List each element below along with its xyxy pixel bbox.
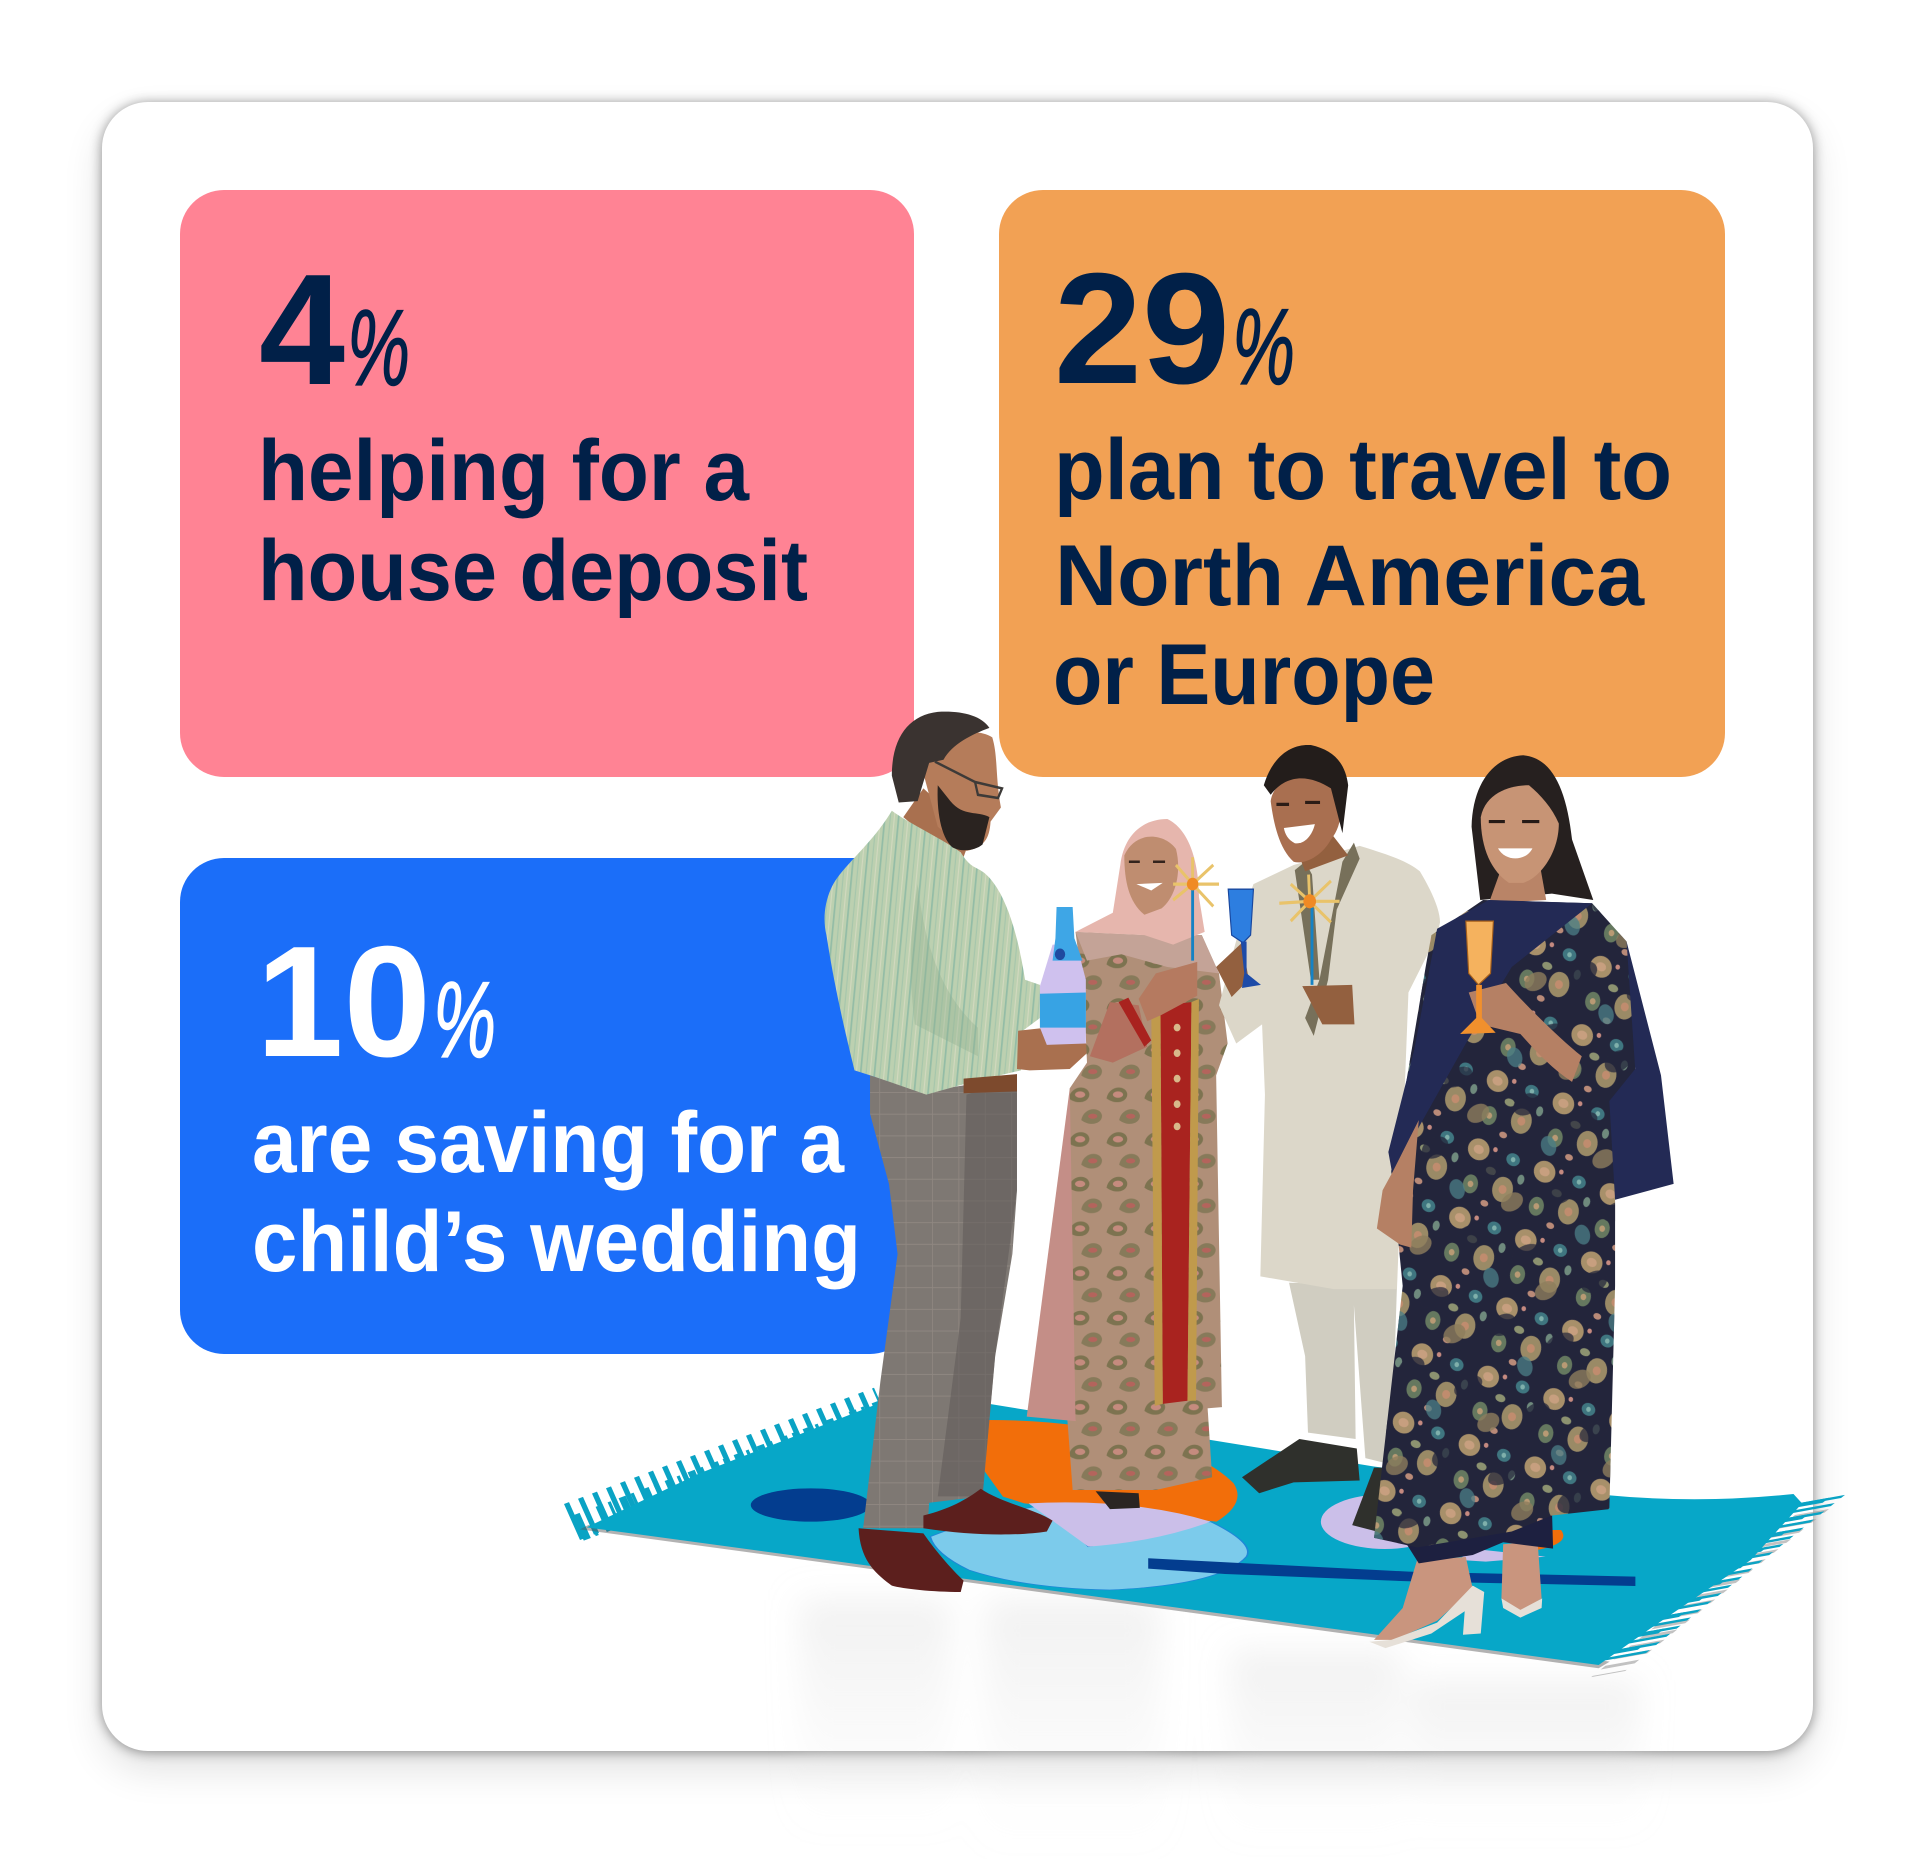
label: are saving for a child's wedding	[252, 1095, 861, 1290]
head	[921, 732, 1001, 851]
shoes	[923, 1489, 1053, 1534]
label: plan to travel to North America or Europe: North America	[1055, 528, 1645, 624]
feet and heels	[1374, 1557, 1473, 1640]
lilac circle right	[1321, 1494, 1449, 1549]
stat: 10 percent: 10	[256, 914, 431, 1090]
beard	[938, 785, 989, 850]
panel: travel	[999, 190, 1725, 777]
person: woman in hijab	[1027, 819, 1228, 1509]
label: plan to travel to North America or Europe	[1053, 422, 1672, 723]
gold buttons	[1174, 1024, 1181, 1130]
stat: 4 percent	[259, 242, 410, 418]
eyes	[1489, 819, 1539, 824]
smile	[1498, 848, 1532, 858]
label: helping for a house deposit	[258, 423, 808, 619]
collar embroidery	[1295, 843, 1360, 1036]
rug with geometric shapes	[580, 1403, 1802, 1668]
hair	[892, 712, 989, 802]
neck	[903, 788, 972, 865]
face	[1124, 837, 1178, 915]
stat: 4 percent: %	[347, 287, 410, 408]
label: are saving for a child's wedding: are saving for a	[252, 1095, 845, 1191]
light blue circle	[930, 1505, 1248, 1590]
rug shadow	[580, 1525, 1610, 1668]
eyes	[1276, 802, 1320, 804]
sandals	[1369, 1586, 1542, 1648]
chiffon tunic side	[1027, 1088, 1121, 1421]
red centre strip	[1160, 1002, 1191, 1404]
panel: wedding	[180, 858, 914, 1354]
face	[1481, 785, 1559, 883]
shoes	[1242, 1439, 1360, 1493]
stat: 10 percent: %	[433, 959, 496, 1080]
label: helping for a house deposit: house deposit	[258, 523, 808, 619]
back hair	[1472, 755, 1593, 900]
lilac wedge	[1029, 1502, 1211, 1547]
paisley tunic	[1070, 932, 1228, 1420]
icon: orange champagne glass	[1460, 921, 1496, 1034]
hijab	[1076, 819, 1205, 945]
small orange and lilac pieces	[1537, 1530, 1563, 1550]
neck	[1297, 833, 1348, 871]
rug fringe right shadow	[1608, 1512, 1812, 1674]
arm and hand	[1090, 1002, 1147, 1063]
neck	[1489, 868, 1546, 903]
white rounded card	[102, 102, 1813, 1751]
shoes	[1096, 1491, 1140, 1509]
arms and hands	[1377, 1120, 1419, 1248]
icon: sparkler left	[1173, 857, 1219, 961]
stat: 29 percent: 29	[1054, 241, 1230, 417]
person: woman in floral dress	[1369, 755, 1674, 1648]
eyes	[1129, 860, 1165, 864]
hands	[1216, 943, 1354, 1024]
kurta	[1219, 846, 1440, 1289]
dupatta	[1388, 900, 1674, 1200]
panel: house deposit	[180, 190, 914, 777]
icon: bottle	[1040, 907, 1086, 1045]
neckline lace	[1076, 932, 1219, 973]
label: helping for a house deposit: helping for a	[258, 423, 750, 519]
person: laughing man	[1216, 745, 1440, 1531]
trouser hems	[1403, 1509, 1553, 1563]
rug body	[587, 1403, 1802, 1665]
stat: 4 percent: 4	[259, 242, 345, 418]
icon: blue glass	[1228, 889, 1261, 988]
belt	[964, 1074, 1017, 1093]
dress	[1374, 900, 1635, 1547]
head	[1271, 778, 1341, 862]
shirt sleeve shadow	[911, 884, 978, 1056]
hand	[1017, 1028, 1094, 1070]
icon: sparkler right	[1279, 875, 1340, 985]
people group	[825, 712, 1674, 1648]
rug fringe left	[572, 1406, 885, 1529]
trousers	[1289, 1283, 1397, 1464]
stat: 29 percent: %	[1232, 286, 1295, 407]
shirt	[825, 811, 1040, 1095]
orange shape	[973, 1420, 1238, 1522]
label: plan to travel to North America or Europe: plan to travel to	[1054, 422, 1672, 518]
navy circle	[751, 1488, 870, 1522]
trousers	[863, 1074, 1017, 1528]
label: plan to travel to North America or Europe: or Europe	[1053, 627, 1435, 723]
dress second print layer	[1374, 900, 1635, 1547]
rug fringe right	[1610, 1499, 1822, 1662]
trousers	[1067, 1407, 1212, 1490]
floor reflection	[800, 1600, 1640, 1850]
smile	[1284, 824, 1315, 843]
label: are saving for a child's wedding: child’s wedding	[252, 1194, 861, 1290]
hair	[1264, 745, 1348, 833]
glasses	[935, 762, 1002, 798]
navy bar	[1148, 1558, 1635, 1586]
person: older man	[825, 712, 1094, 1592]
smile	[1136, 883, 1163, 890]
